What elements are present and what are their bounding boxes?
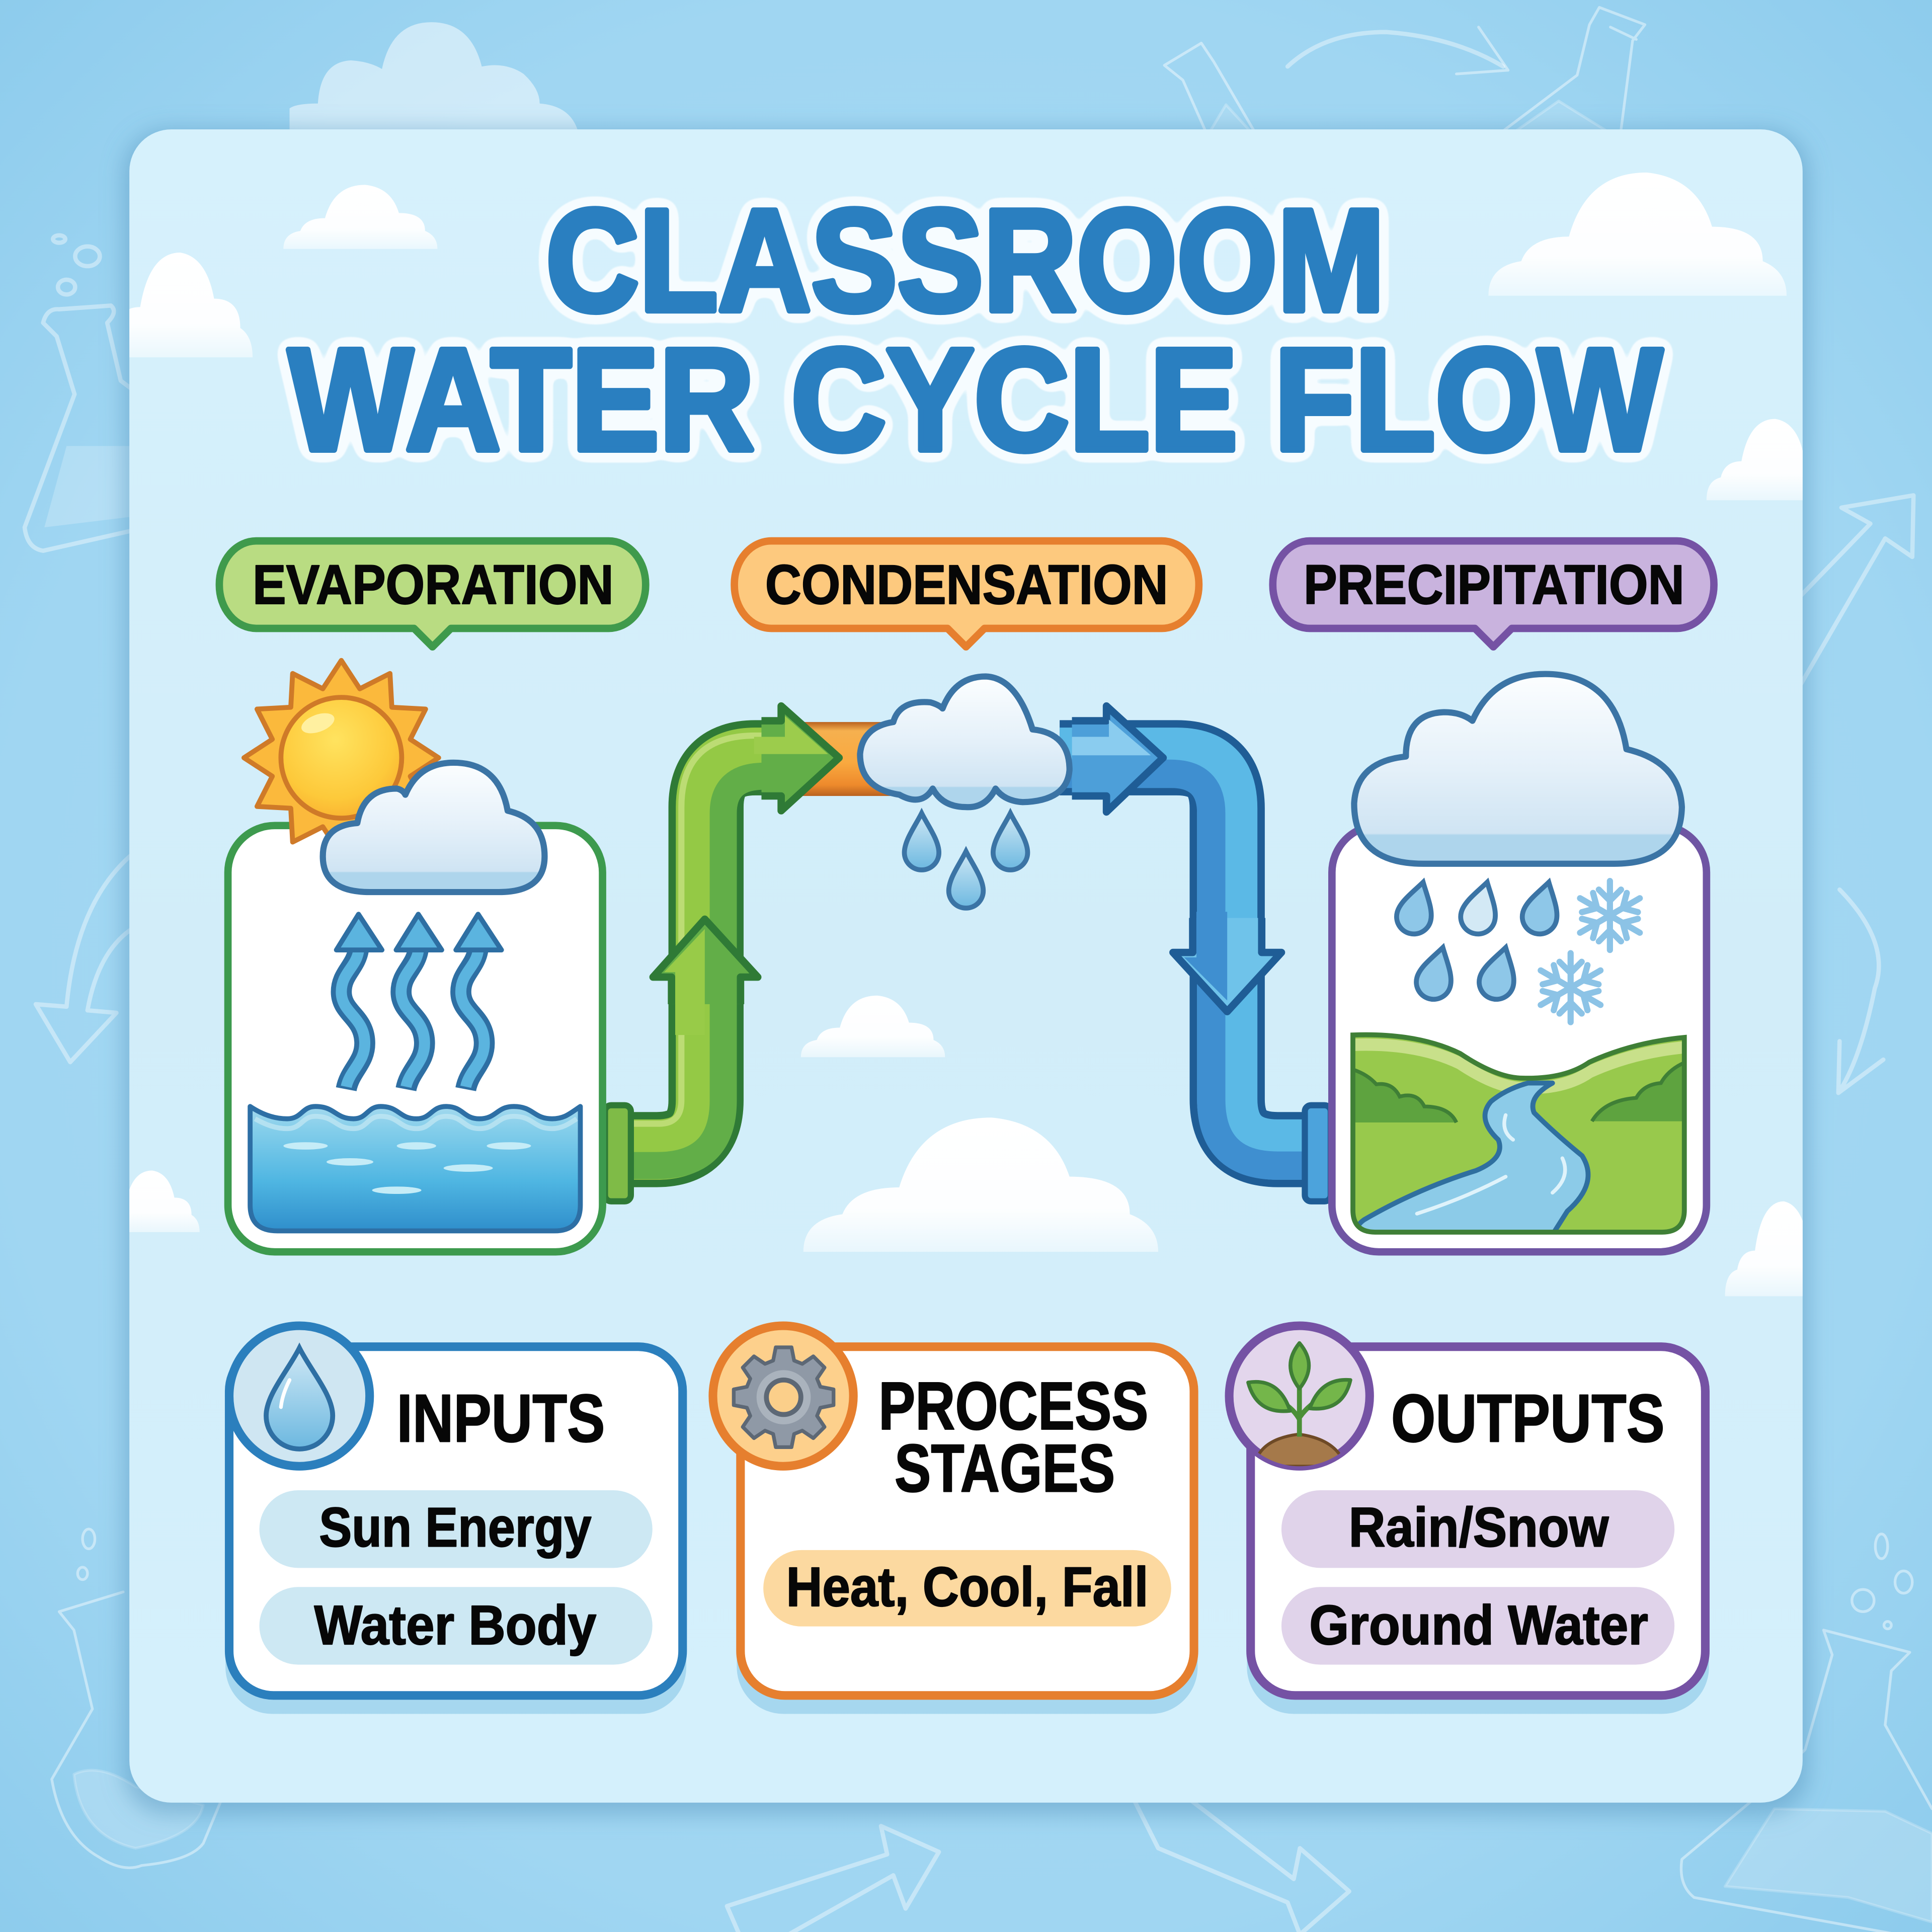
card: process stages [713,1326,1197,1714]
icon: snowflake 1 [1574,881,1645,950]
card: inputs [225,1326,686,1714]
chalk arrow top [1287,27,1508,74]
panel: main card [99,129,1836,1803]
icon: sprout [1229,1326,1370,1466]
icon: water drop [229,1326,370,1466]
label: precipitation [1273,541,1714,647]
icon: cloud [1354,674,1682,864]
label: evaporation [219,541,646,647]
chalk arrow right top [1799,495,1913,688]
connector: green [605,1105,631,1201]
label: precipitation: PRECIPITATION [1304,554,1684,616]
icon: snowflake 2 [1535,953,1606,1022]
heading: OUTPUTS [1391,1380,1665,1456]
heading: INPUTS [397,1380,605,1456]
pill: sun energy: Sun Energy [319,1496,592,1558]
pill: water body [260,1587,653,1665]
pill: rain snow: Rain/Snow [1349,1496,1609,1558]
pipe: orange section [798,722,897,796]
panel shadow [123,129,1809,1815]
water body [250,1106,580,1231]
top pale cloud [290,22,579,135]
chalk arrow right bottom [1838,890,1883,1093]
chalk flask bottom left [52,1529,222,1868]
panel clouds [99,173,1836,1296]
pipe: green with arrows [605,706,839,1201]
icon: cloud [860,676,1070,807]
pipe: blue with arrows [1060,706,1331,1201]
chalk flask top 1 [1164,43,1257,135]
title [288,179,1663,481]
pill: water body: Water Body [314,1594,596,1656]
pill: heat cool fall: Heat, Cool, Fall [786,1556,1148,1618]
pill: ground water: Ground Water [1309,1594,1648,1656]
rising vapour arrows [337,914,502,1089]
card: outputs [1229,1326,1709,1714]
chalk flask left [25,235,135,551]
stage box: evaporation [228,661,603,1252]
chalk arrow left [36,851,135,1062]
pill: sun energy [260,1490,653,1568]
arrow: up [653,919,758,1035]
heading [878,1368,1148,1506]
arrow: down [1173,912,1281,1012]
chalk arrow bottom 1 [727,1826,939,1932]
icon: sun [244,661,439,855]
connector: blue [1305,1105,1331,1201]
icon: cloud [323,763,544,892]
chalk arrow bottom 2 [1134,1799,1349,1932]
pill: rain snow [1281,1490,1674,1568]
title: WATER CYCLE FLOW [288,318,1663,481]
arrow: right [754,706,839,811]
chalk flask bottom right [1681,1534,1932,1932]
label: evaporation: EVAPORATION [253,554,614,616]
label: condensation: CONDENSATION [765,554,1168,616]
condensation cloud with drops [860,676,1070,908]
chalk flask top 2 [1497,8,1645,135]
stage box: precipitation [1332,674,1707,1252]
heading: STAGES [895,1430,1115,1506]
arrow: right [1072,706,1163,812]
rain drops [1393,878,1565,1003]
icon: gear [713,1326,853,1466]
label: condensation [735,541,1199,647]
heading: PROCESS [878,1368,1148,1444]
drops [905,813,939,870]
title: CLASSROOM [546,179,1385,342]
landscape with river [1349,1029,1688,1238]
